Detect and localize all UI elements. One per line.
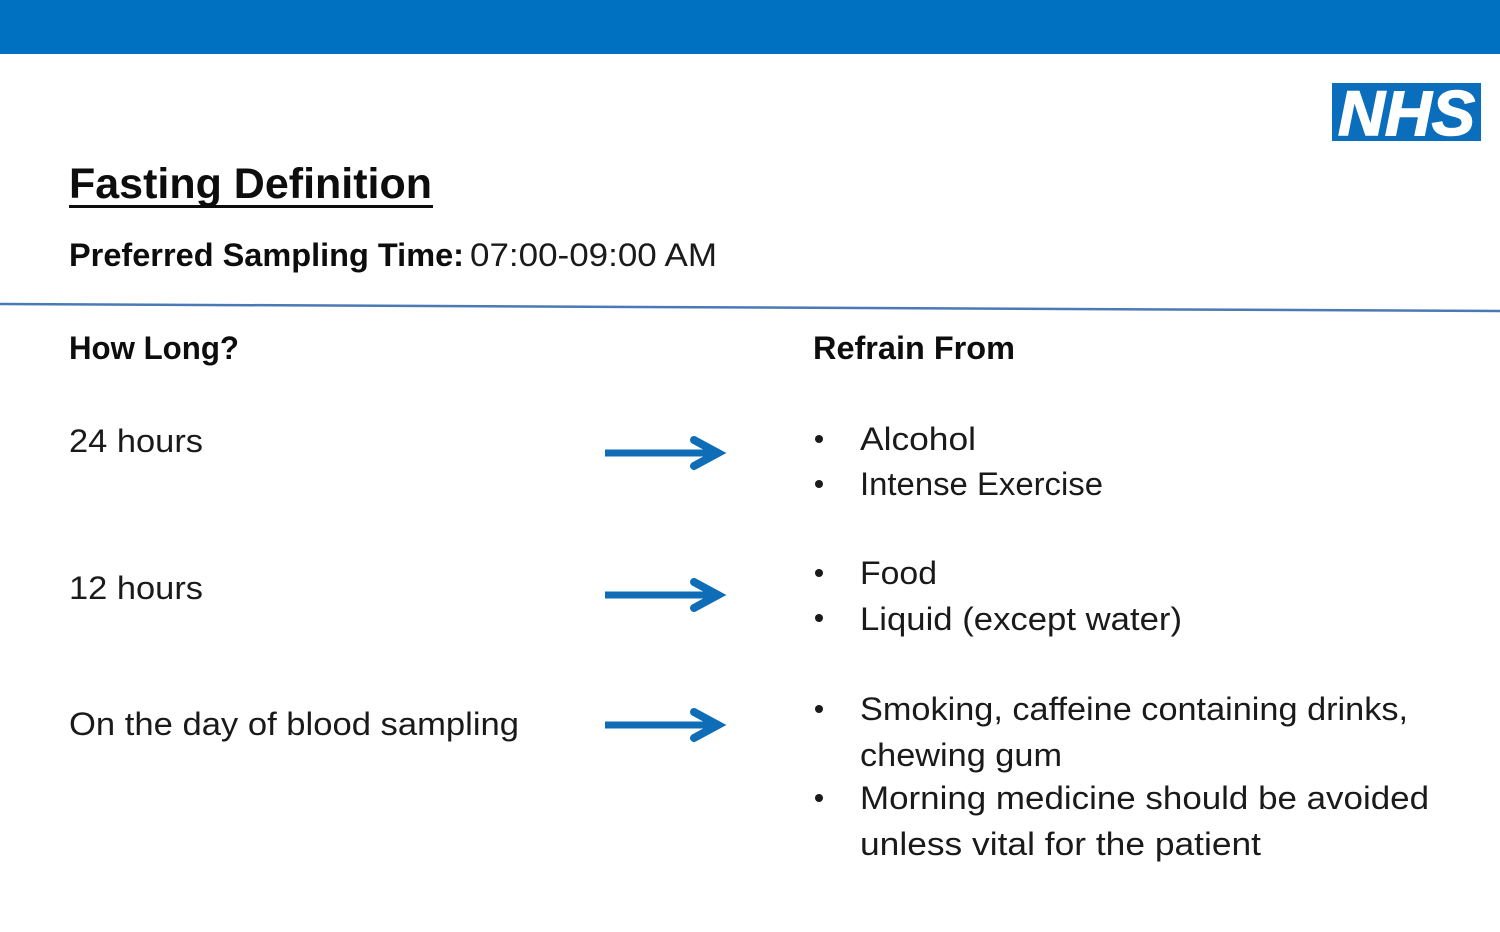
arrow: 24 hours [605, 440, 718, 466]
row label: 24 hours: 24 hours [69, 423, 203, 459]
preferred sampling time: 07:00-09:00 AM [470, 237, 717, 273]
list: food, liquid: Liquid (except water) [860, 601, 1182, 637]
list: smoking, morning medicine: chewing gum [860, 737, 1062, 773]
row label: on the day of blood sampling: On the day of blood sampling [69, 706, 519, 742]
list: smoking, morning medicine: Morning medicine should be avoided [860, 780, 1429, 816]
list: smoking, morning medicine: unless vital for the patient [860, 826, 1261, 862]
column heading: how long: How Long? [69, 330, 239, 366]
column heading: refrain from: Refrain From [813, 330, 1015, 366]
row label: 12 hours: 12 hours [69, 570, 203, 606]
list: alcohol, intense exercise: Alcohol [860, 421, 976, 457]
preferred sampling time [69, 237, 717, 273]
list: food, liquid: Food [860, 555, 937, 591]
preferred sampling time: Preferred Sampling Time: [69, 237, 464, 273]
list: smoking, morning medicine: Smoking, caffeine containing drinks, [860, 691, 1408, 727]
title: Fasting Definition [69, 160, 432, 208]
list: alcohol, intense exercise [815, 421, 1103, 502]
NHS logo: NHS [1338, 79, 1475, 149]
list: smoking, morning medicine [815, 691, 1429, 862]
list: food, liquid [815, 555, 1182, 637]
list: alcohol, intense exercise: Intense Exercise [860, 466, 1103, 502]
arrow: 12 hours [605, 582, 718, 608]
top banner [0, 0, 1500, 54]
arrow: on the day [605, 712, 718, 738]
